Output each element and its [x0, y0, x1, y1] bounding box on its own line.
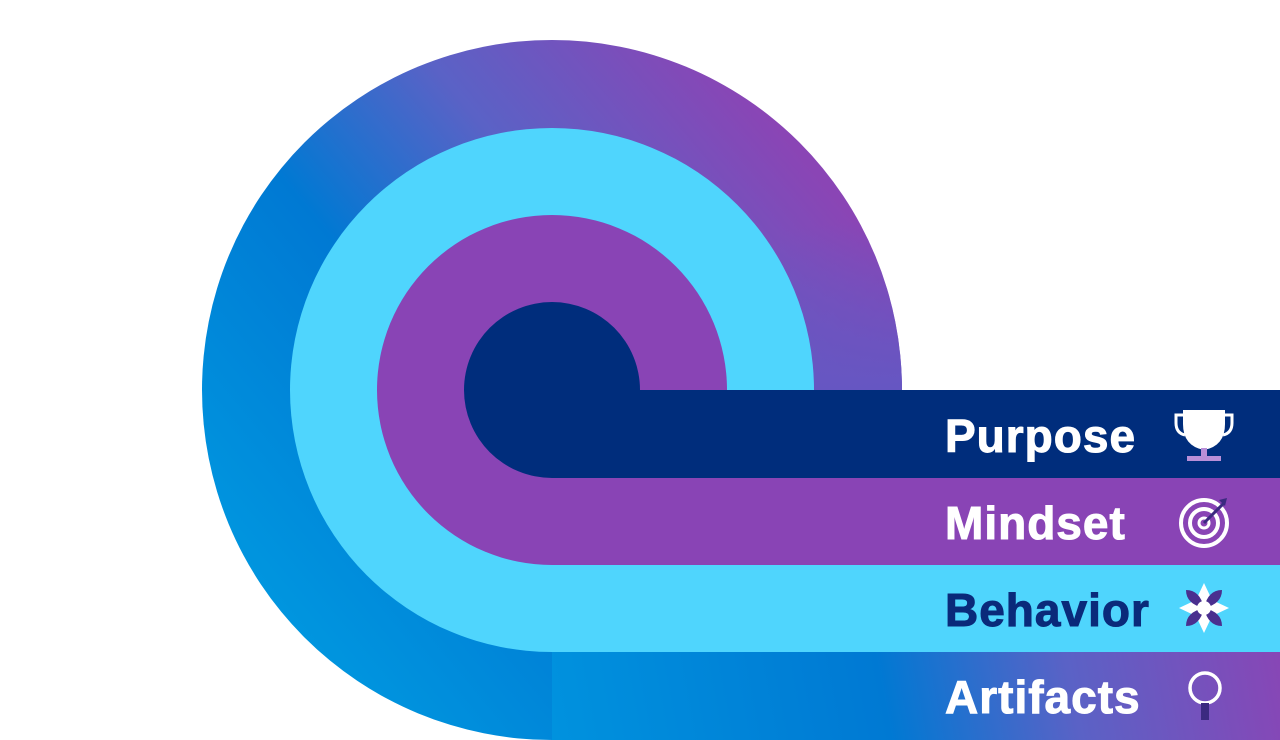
- icon: target: [1181, 498, 1227, 546]
- icon: lens: [1190, 673, 1220, 720]
- band: behavior (cyan ring): [290, 128, 1280, 652]
- band: mindset (purple ring): [377, 215, 1280, 565]
- label: Artifacts: Artifacts: [945, 671, 1141, 723]
- band: purpose (navy core): [464, 302, 1280, 478]
- band: artifacts (outer ring): [202, 40, 1280, 740]
- label: Mindset: Mindset: [945, 497, 1126, 549]
- label: Purpose: Purpose: [945, 410, 1136, 462]
- icon: trophy: [1176, 410, 1232, 461]
- label: Behavior: Behavior: [945, 584, 1150, 636]
- icon: flower: [1179, 583, 1229, 633]
